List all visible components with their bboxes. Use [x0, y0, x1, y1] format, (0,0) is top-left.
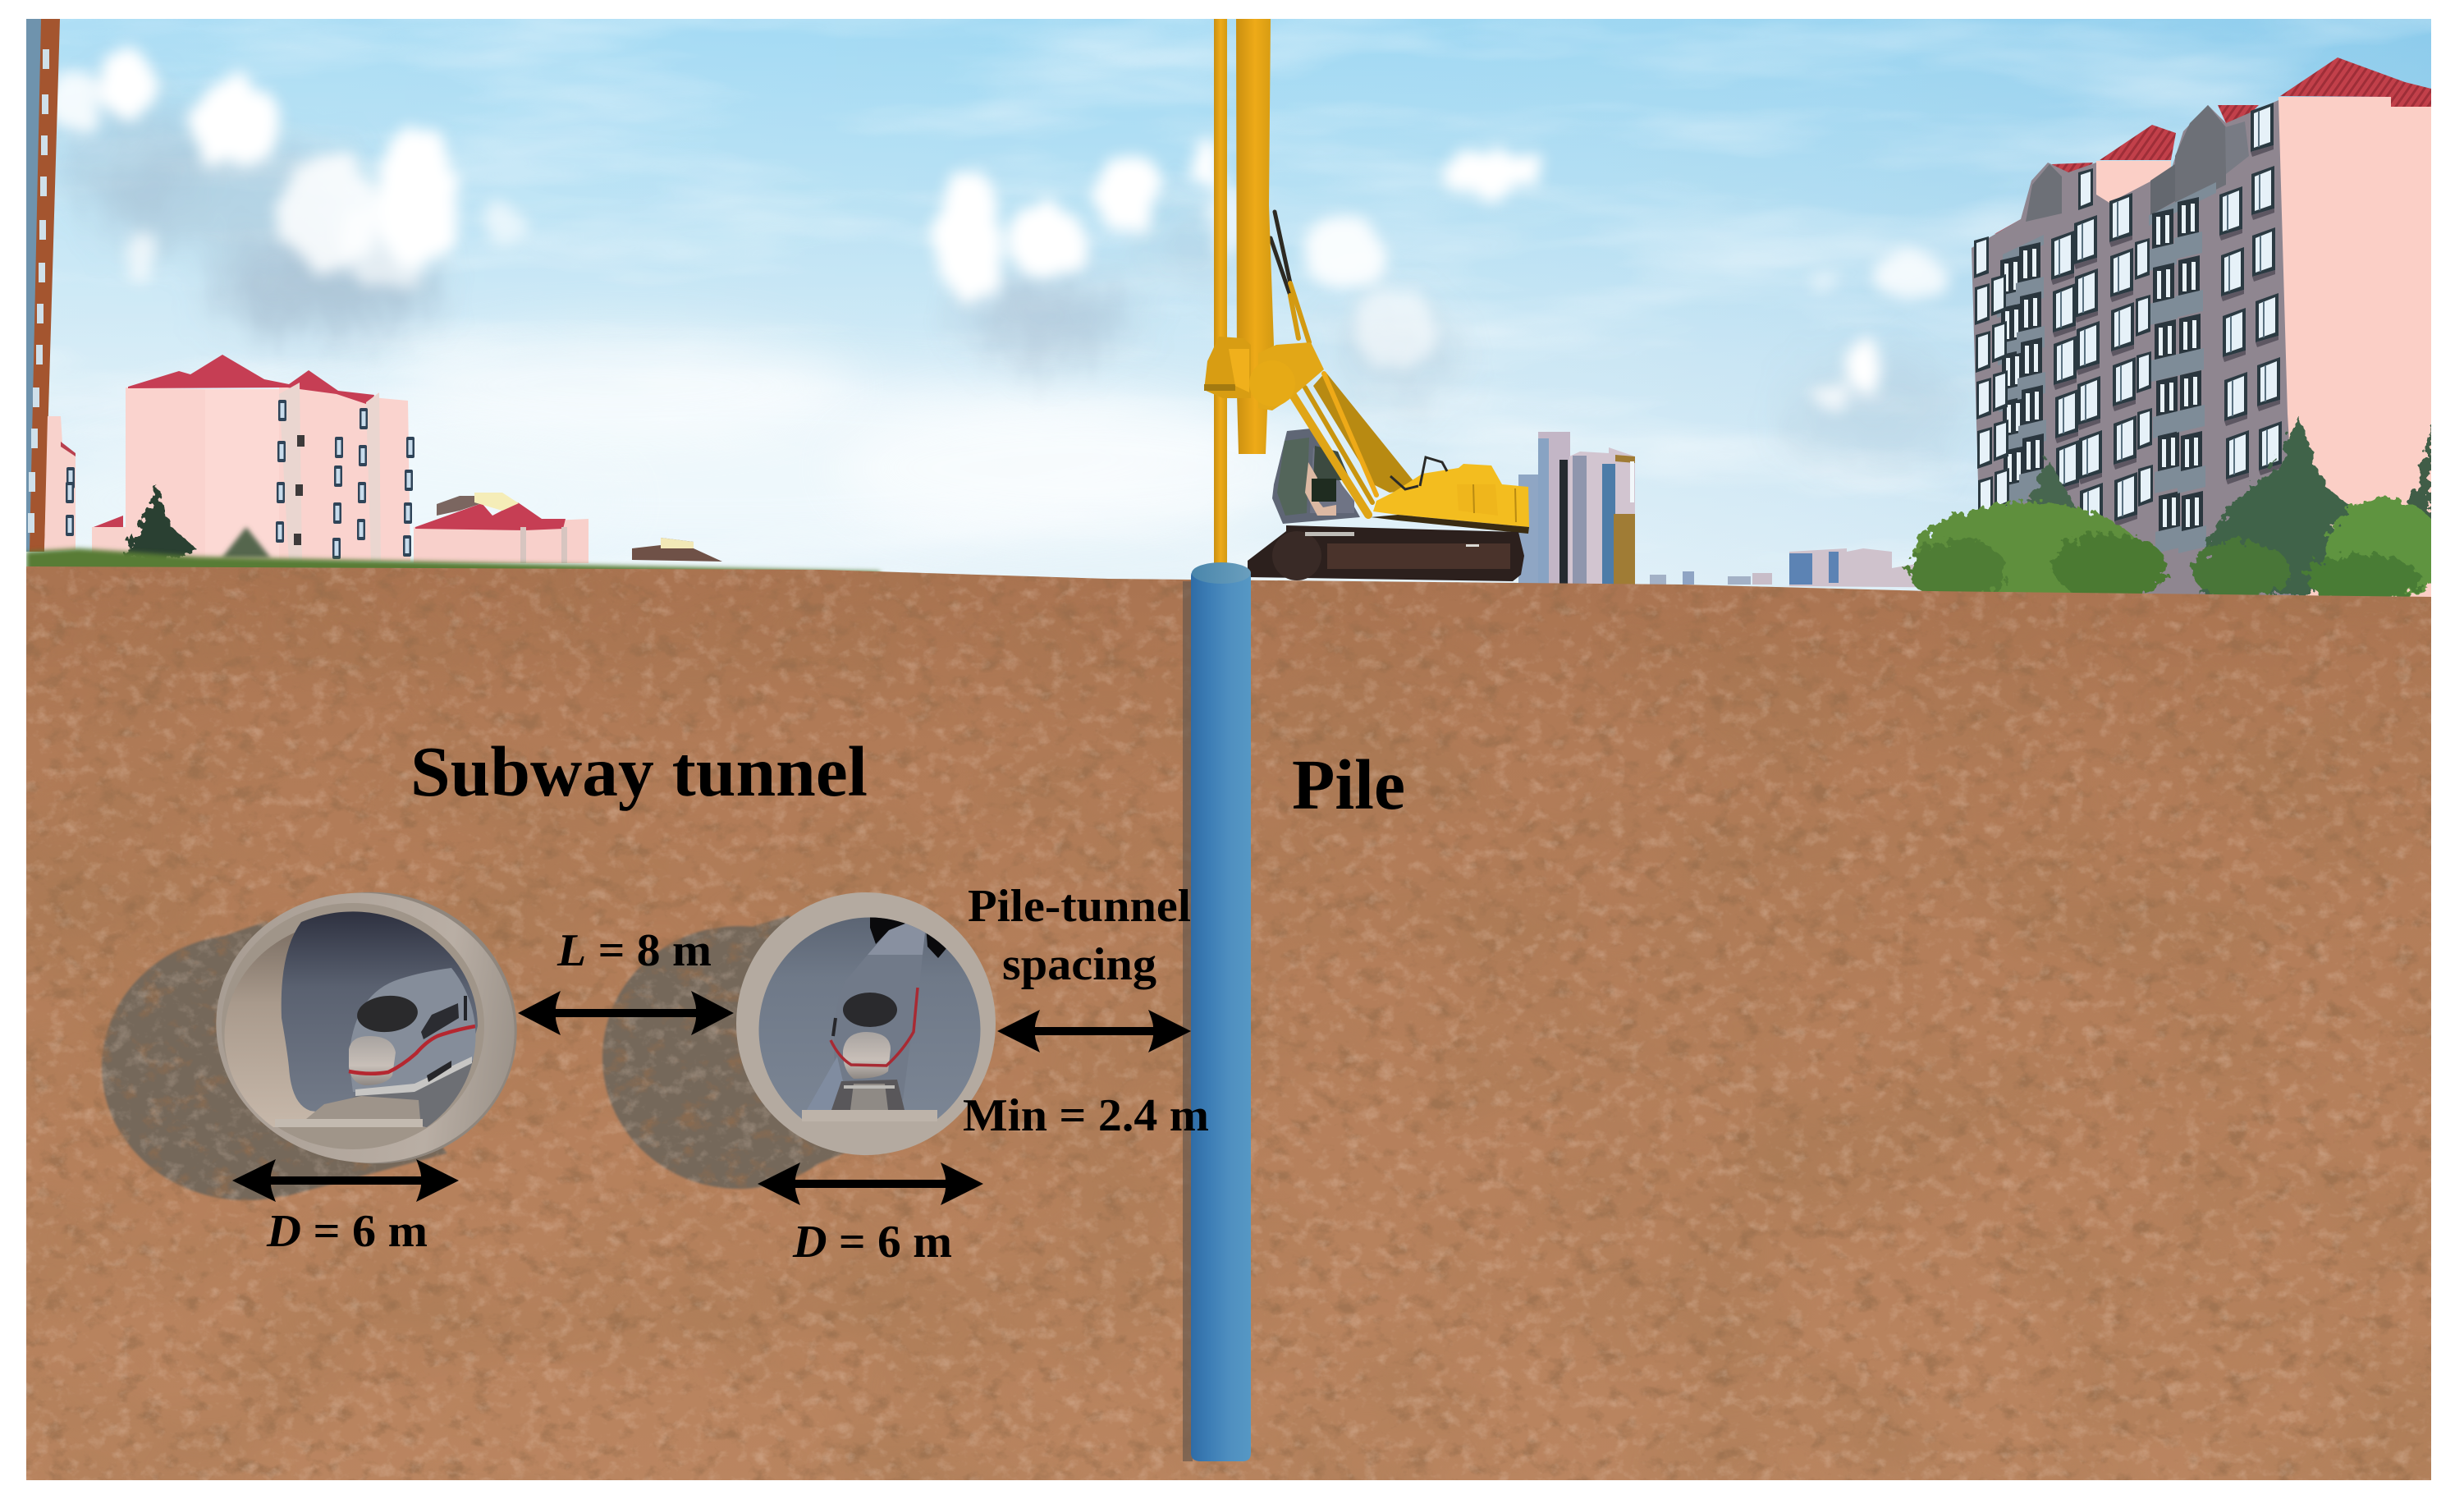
arrow: left diameter: [232, 1159, 459, 1202]
soil ground: [26, 558, 2431, 1494]
heading: subway tunnel: Subway tunnel: [410, 731, 868, 811]
icon: bracket: [1249, 342, 1324, 410]
left pink buildings: [44, 355, 722, 563]
label: pile-tunnel spacing: spacing: [1002, 939, 1156, 990]
tunnel interior: [758, 918, 980, 1119]
icon: rig cab: [1272, 429, 1360, 524]
tunnel ring: [736, 892, 996, 1155]
heading: pile: Pile: [1292, 745, 1405, 824]
left distant tower: [26, 19, 60, 552]
icon: engine body: [1371, 457, 1529, 534]
icon: rotary head: [1204, 337, 1251, 398]
arrow: pile-tunnel spacing: [997, 1010, 1191, 1052]
track floor: [275, 1096, 423, 1127]
pile: [1183, 562, 1251, 1461]
clouds: [48, 48, 1970, 460]
icon: boom: [1313, 372, 1414, 493]
icon: hydraulic cylinders: [1271, 212, 1376, 515]
train: [316, 965, 484, 1127]
middle distance building: [1518, 432, 1986, 588]
icon: drill rod: [1214, 19, 1227, 565]
left trees and grass: [26, 486, 880, 576]
label: minimum spacing: Min = 2.4 m: [963, 1090, 1209, 1141]
tunnel shadows: [102, 915, 875, 1200]
excavator drilling rig: [1204, 19, 1529, 581]
label: left D = 6 m: D = 6 m: [266, 1206, 428, 1257]
left tunnel: [199, 869, 538, 1186]
train: [804, 903, 952, 1114]
label: L = 8 m: L = 8 m: [556, 925, 712, 976]
track floor: [802, 1110, 937, 1121]
right tunnel: [736, 892, 996, 1155]
label: right D = 6 m: D = 6 m: [792, 1217, 952, 1268]
right trees: [1908, 415, 2443, 614]
icon: mast: [1236, 19, 1274, 454]
label: pile-tunnel spacing: Pile-tunnel: [968, 881, 1191, 932]
sky background: [26, 19, 2431, 594]
tunnel ring: [199, 869, 538, 1186]
right apartment building: [1972, 57, 2431, 599]
label: pile-tunnel spacing: [968, 881, 1191, 990]
arrow: L spacing: [518, 991, 734, 1035]
tunnel interior: [225, 911, 478, 1127]
arrow: right diameter: [758, 1162, 983, 1205]
icon: crawler tracks: [1248, 525, 1524, 581]
